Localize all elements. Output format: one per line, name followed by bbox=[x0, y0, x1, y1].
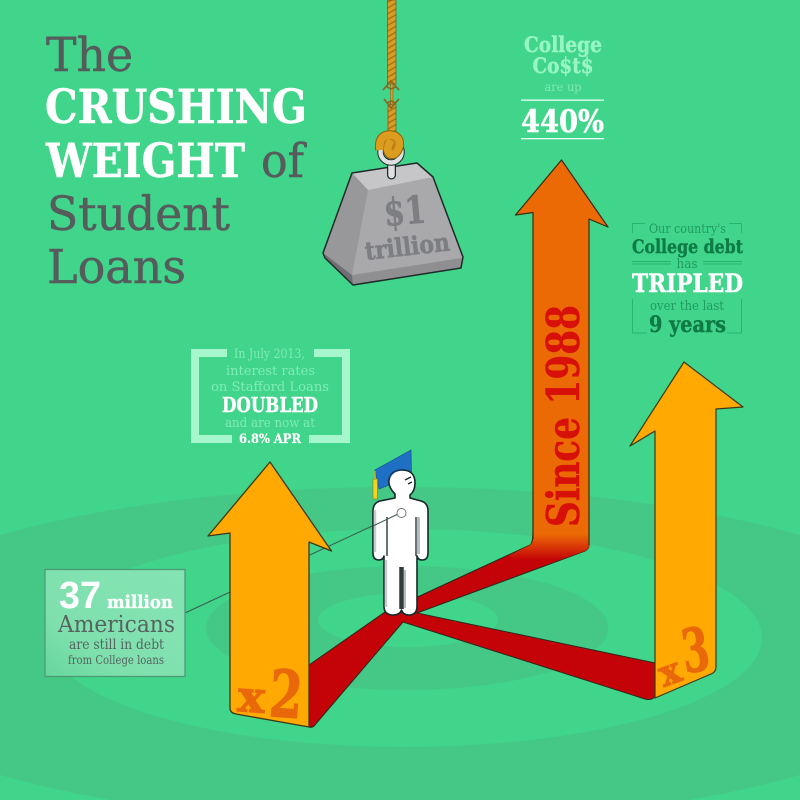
callout: college costs: are up bbox=[544, 79, 582, 94]
icon: graduation cap bbox=[373, 450, 412, 499]
callout: college costs: 440% bbox=[521, 104, 604, 140]
arrow: x2 orange bbox=[208, 462, 332, 734]
label: since 1988: Since 1988 bbox=[537, 305, 590, 527]
title: CRUSHING bbox=[45, 80, 307, 135]
label: x2: x bbox=[236, 672, 267, 724]
callout: college debt tripled: 9 years bbox=[649, 312, 726, 338]
label: x2: 2 bbox=[267, 656, 305, 734]
label: x3: x bbox=[653, 649, 687, 695]
callout box: 37 million bbox=[45, 570, 185, 676]
body bbox=[373, 470, 428, 615]
connector line: person to 37 million box bbox=[185, 514, 398, 613]
callout: interest rates doubled: interest rates bbox=[226, 364, 315, 379]
callout: college costs: College bbox=[524, 32, 602, 57]
weight label: $1 bbox=[382, 186, 428, 235]
callout box: 37 million: are still in debt bbox=[69, 637, 164, 653]
title: WEIGHT bbox=[45, 134, 245, 189]
weight label bbox=[363, 186, 451, 266]
callout: interest rates doubled bbox=[195, 347, 346, 447]
icon: weight bbox=[323, 163, 463, 285]
callout: college debt tripled: over the last bbox=[650, 299, 725, 314]
arrow: since 1988 red-orange bbox=[508, 160, 608, 567]
callout: interest rates doubled: In July 2013, bbox=[234, 347, 305, 362]
title: Student bbox=[47, 187, 230, 242]
callout: college debt tripled: Our country's bbox=[649, 222, 726, 237]
label: x2 bbox=[236, 656, 305, 734]
arrow: x3 orange bbox=[630, 362, 743, 698]
callout: interest rates doubled: and are now at bbox=[225, 416, 316, 431]
person figure bbox=[373, 450, 428, 615]
callout: interest rates doubled: on Stafford Loans bbox=[211, 380, 329, 395]
title: Loans bbox=[47, 240, 186, 295]
callout box: 37 million: Americans bbox=[57, 612, 175, 638]
callout: college costs bbox=[521, 32, 604, 140]
callout: college debt tripled: TRIPLED bbox=[632, 269, 743, 298]
callout box: 37 million: million bbox=[107, 592, 173, 613]
title bbox=[45, 28, 307, 295]
callout: interest rates doubled: DOUBLED bbox=[222, 393, 318, 417]
title: The bbox=[46, 28, 133, 83]
icon: eye hook and knot bbox=[380, 135, 402, 175]
callout: interest rates doubled: 6.8% APR bbox=[239, 432, 301, 447]
callout: college debt tripled: College debt bbox=[632, 236, 743, 258]
weight label: trillion bbox=[363, 228, 451, 266]
callout box: 37 million: from College loans bbox=[68, 653, 164, 667]
callout: college debt tripled: has bbox=[676, 257, 698, 272]
callout: college costs: Co$t$ bbox=[532, 53, 594, 78]
callout: college debt tripled bbox=[632, 222, 743, 338]
title: of bbox=[261, 134, 307, 189]
callout box: 37 million: 37 bbox=[59, 575, 101, 617]
label: x3 bbox=[653, 615, 714, 695]
label: x3: 3 bbox=[677, 615, 714, 688]
red floor ribbons bbox=[309, 530, 655, 727]
target rings on ground bbox=[0, 487, 800, 800]
rope bbox=[383, 0, 399, 134]
